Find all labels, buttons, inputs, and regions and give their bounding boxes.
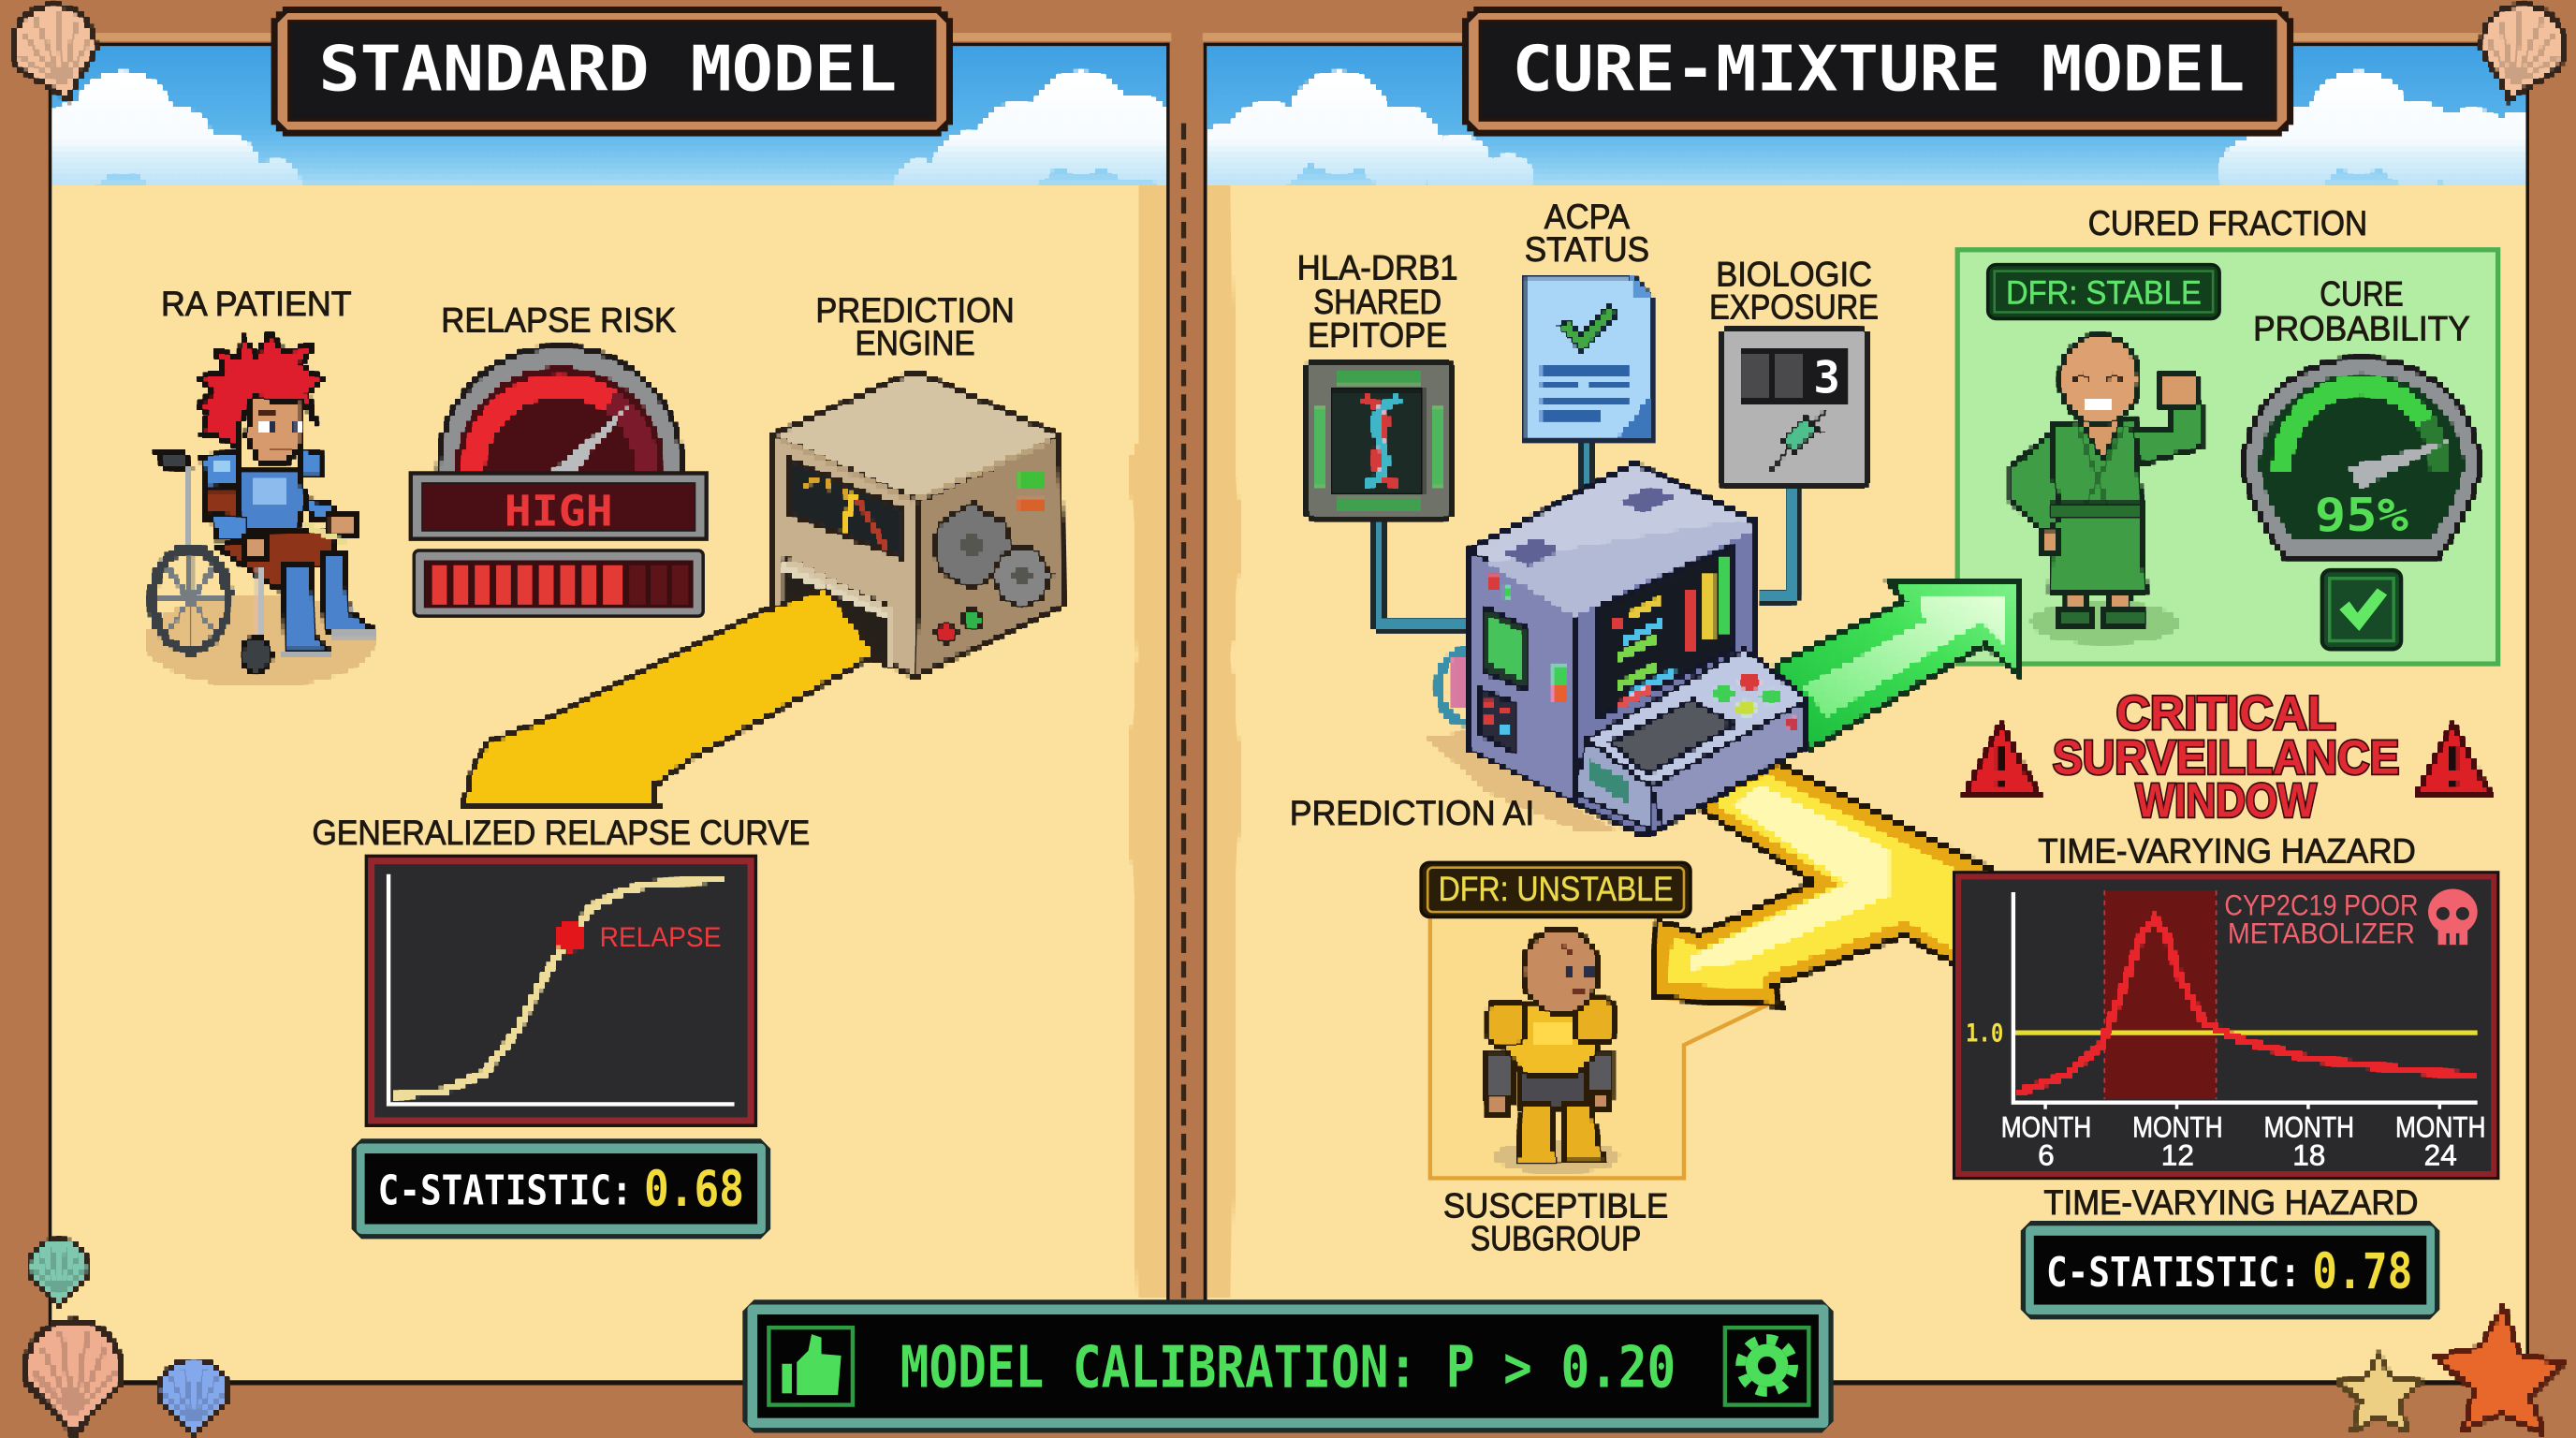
icon: shell top left [4, 0, 107, 110]
heading: standard model [271, 7, 953, 137]
heading: critical surveillance window: WINDOW [2136, 773, 2317, 827]
chart: time-varying hazard: 1.0 [1966, 1020, 2003, 1049]
icon: orange starfish [2437, 1306, 2563, 1432]
label: susceptible subgroup: SUBGROUP [1471, 1220, 1641, 1258]
label: prediction engine: PREDICTION [815, 291, 1015, 330]
gauge: cure probability 95%: 95% [2315, 488, 2408, 542]
heading: critical surveillance window: CRITICAL [2116, 686, 2336, 740]
label: hla-drb1 shared epitope: EPITOPE [1308, 315, 1447, 354]
label: relapse risk: RELAPSE RISK [441, 301, 677, 340]
icon: warning triangle left [1965, 725, 2039, 795]
chart: time-varying hazard: 24 [2424, 1137, 2457, 1171]
icon: gear [1725, 1328, 1808, 1405]
connectors to prediction ai [1379, 439, 1793, 624]
label: susceptible subgroup [1443, 1187, 1668, 1258]
icon: green check badge [2322, 570, 2401, 649]
label: time-varying hazard upper: TIME-VARYING HAZARD [2038, 831, 2416, 870]
icon: dna chip [1306, 361, 1453, 518]
label: susceptible subgroup: SUSCEPTIBLE [1443, 1187, 1668, 1225]
label: cure probability: CURE [2320, 274, 2404, 313]
center divider [1170, 46, 1204, 1380]
chart: time-varying hazard: MONTH [2132, 1110, 2223, 1144]
icon: cured patient in green robe [2011, 335, 2202, 644]
c-statistic 0.78 [2021, 1221, 2439, 1319]
chart: time-varying hazard: METABOLIZER [2228, 916, 2415, 949]
label: acpa status [1525, 198, 1649, 269]
icon: susceptible patient in gold armor [1486, 929, 1620, 1173]
label: RA patient: RA PATIENT [161, 285, 352, 323]
icon: biologic counter with syringe [1721, 330, 1866, 487]
panel: cured fraction [1957, 204, 2498, 664]
panel: cure-mixture model background [1188, 33, 2561, 1386]
chart: time-varying hazard: 18 [2292, 1137, 2325, 1171]
banner: model calibration: MODEL CALIBRATION: P > 0.20 [900, 1334, 1676, 1401]
label: prediction engine: ENGINE [856, 324, 975, 362]
badge: dfr stable: DFR: STABLE [2006, 275, 2202, 312]
arrow: green path to cured fraction [1776, 204, 2498, 749]
chart: time-varying hazard [1954, 873, 2498, 1178]
icon: skull [2428, 889, 2478, 945]
chart: time-varying hazard: CYP2C19 POOR [2224, 888, 2419, 922]
chart: time-varying hazard: MONTH [2395, 1110, 2485, 1144]
icon: yellow starfish [2339, 1354, 2422, 1431]
gauge: cure probability 95% [2244, 359, 2479, 557]
c-statistic 0.78: 0.78 [2312, 1243, 2412, 1300]
icon: prediction ai computer [1427, 463, 1808, 836]
gauge: relapse risk high: HIGH [505, 487, 613, 536]
c-statistic 0.78: C-STATISTIC: [2046, 1249, 2301, 1297]
label: acpa status: ACPA [1544, 198, 1630, 236]
label: hla-drb1 shared epitope: HLA-DRB1 [1297, 248, 1458, 286]
badge: dfr stable [1988, 265, 2219, 318]
chart: time-varying hazard: 6 [2038, 1137, 2055, 1171]
icon: acpa document with check [1523, 276, 1651, 439]
c-statistic 0.68: C-STATISTIC: [378, 1167, 633, 1214]
badge: dfr unstable: DFR: UNSTABLE [1439, 870, 1674, 908]
chart: generalized relapse curve: RELAPSE [600, 922, 721, 953]
label: generalized relapse curve: GENERALIZED RELAPSE CURVE [312, 814, 810, 852]
icon: teal shell [29, 1240, 88, 1305]
chart: time-varying hazard: MONTH [2001, 1110, 2091, 1144]
panel: cured fraction: CURED FRACTION [2088, 204, 2367, 242]
c-statistic 0.68 [352, 1138, 770, 1239]
icon: RA patient in wheelchair [144, 333, 378, 687]
label: prediction ai: PREDICTION AI [1290, 794, 1534, 832]
icon: shell top right [2469, 0, 2572, 110]
banner: model calibration [742, 1299, 1834, 1432]
label: biologic exposure [1709, 255, 1879, 326]
c-statistic 0.68: 0.68 [644, 1161, 744, 1218]
label: cure probability: PROBABILITY [2253, 309, 2470, 347]
label: hla-drb1 shared epitope [1297, 248, 1458, 354]
heading: standard model: STANDARD MODEL [318, 33, 897, 106]
arrow: yellow path to hazard and susceptible subgroup [1421, 761, 1991, 1258]
label: biologic exposure: BIOLOGIC [1716, 255, 1872, 293]
icon: biologic counter with syringe: 3 [1813, 352, 1840, 404]
panel: standard model background [2, 33, 1214, 1386]
gauge: relapse risk high [411, 346, 707, 616]
heading: cure-mixture model [1462, 7, 2293, 137]
icon: thumbs up [768, 1328, 853, 1405]
label: cure probability [2253, 274, 2470, 347]
heading: cure-mixture model: CURE-MIXTURE MODEL [1513, 33, 2245, 106]
chart: time-varying hazard: 12 [2161, 1137, 2194, 1171]
label: acpa status: STATUS [1525, 230, 1649, 269]
chart: generalized relapse curve [366, 856, 755, 1125]
panel: susceptible subgroup [1421, 862, 1766, 1258]
heading: critical surveillance window [2053, 686, 2399, 827]
icon: blue shell [158, 1359, 228, 1435]
label: biologic exposure: EXPOSURE [1709, 287, 1879, 326]
chart: time-varying hazard: MONTH [2264, 1110, 2354, 1144]
icon: prediction engine machine with yellow ribbon [463, 372, 1063, 807]
label: hla-drb1 shared epitope: SHARED [1313, 283, 1442, 321]
label: time-varying hazard lower: TIME-VARYING HAZARD [2043, 1183, 2419, 1222]
badge: dfr unstable [1421, 862, 1690, 917]
label: prediction engine [815, 291, 1015, 362]
icon: warning triangle right [2417, 725, 2491, 795]
heading: critical surveillance window: SURVEILLANCE [2053, 731, 2399, 785]
icon: peach shell [26, 1321, 121, 1435]
